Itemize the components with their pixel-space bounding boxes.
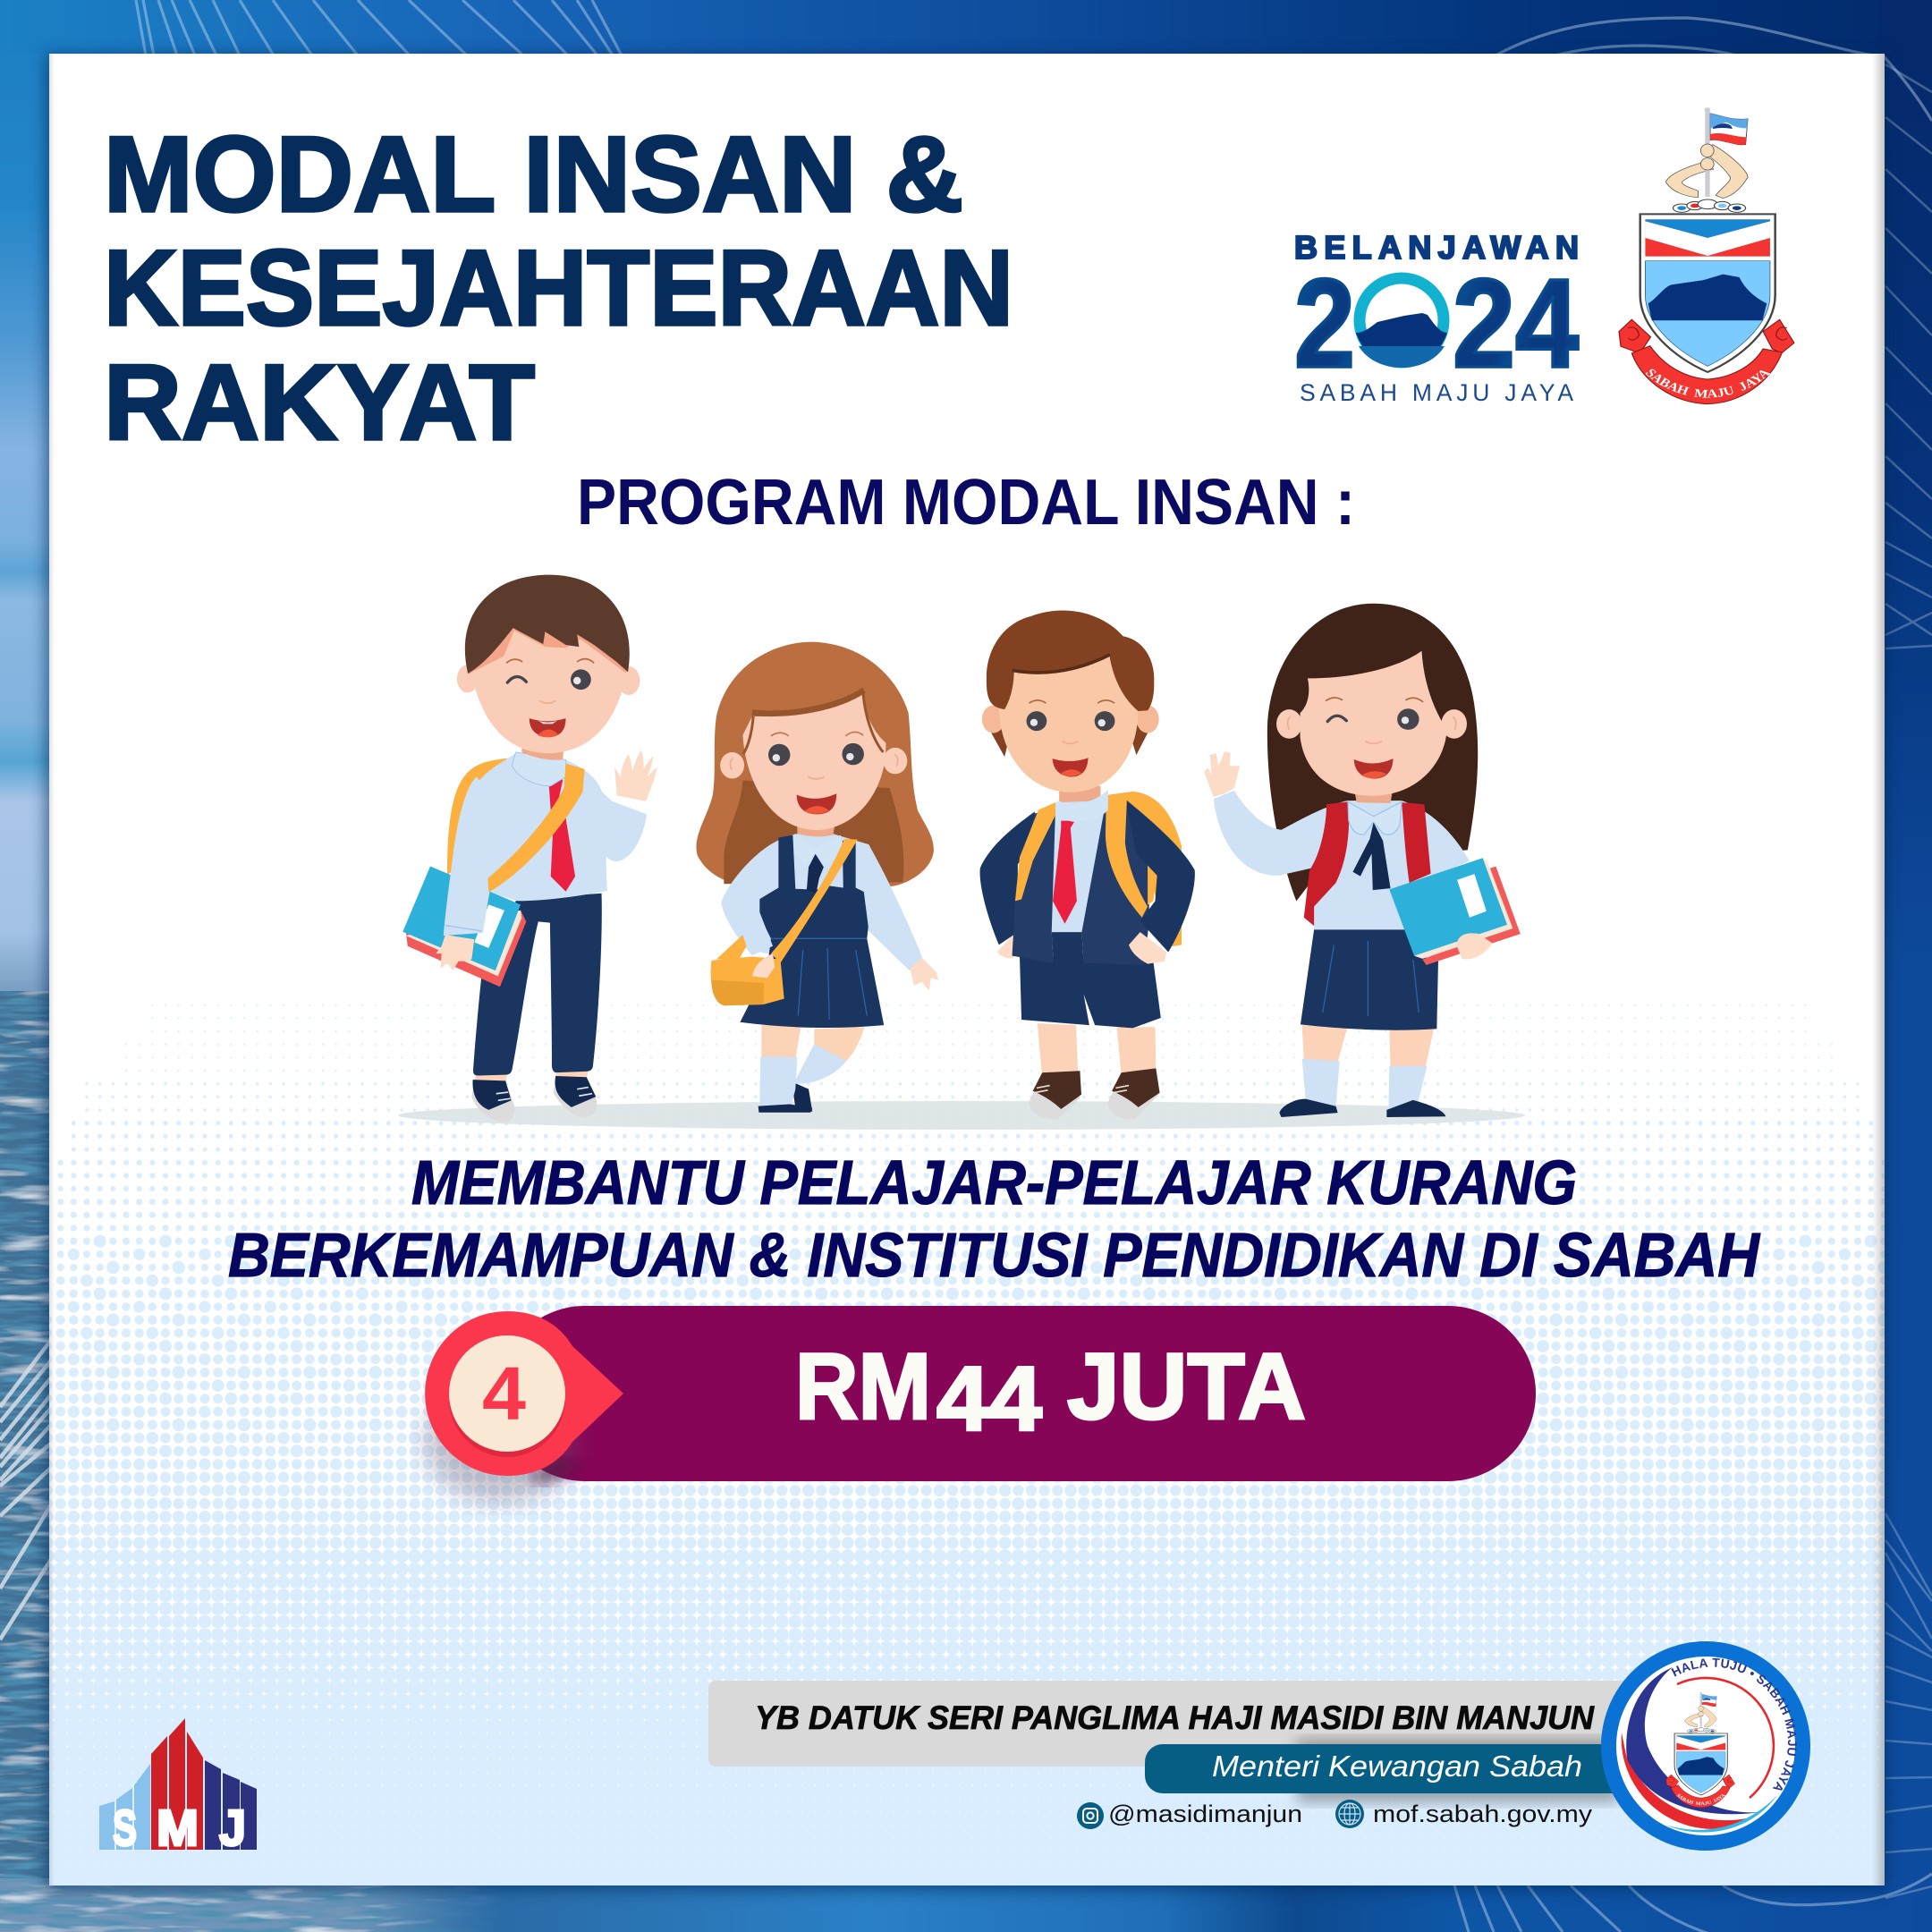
minister title bar [1145,1740,1637,1802]
number marker pin [425,1311,623,1503]
logo: Belanjawan 2024: 2 [1294,252,1355,394]
amount pill: RM44 JUTA: 44 [936,1348,1042,1450]
minister title bar: Menteri Kewangan Sabah [1212,1750,1582,1783]
logo: SMJ: J [219,1800,246,1857]
ground shadow [398,1101,1525,1130]
logo: SMJ [99,1718,257,1857]
illustration: boy with books [402,575,657,1123]
social handles [1077,1800,1593,1829]
title: RAKYAT [104,343,535,462]
seal: Hala Tuju Sabah Maju Jaya: HALA TUJU • SABAH MAJU JAYA [1671,1658,1797,1791]
logo: Belanjawan 2024: BELANJAWAN [1294,229,1579,266]
illustration: girl with shoulder bag [696,642,938,1113]
description text: MEMBANTU PELAJAR-PELAJAR KURANG [411,1148,1577,1217]
amount pill: RM44 JUTA: RM [795,1335,931,1439]
illustration: boy in blazer [980,611,1195,1120]
heading: program: PROGRAM MODAL INSAN : [577,467,1355,538]
amount pill: RM44 JUTA [497,1306,1536,1481]
description text: BERKEMAMPUAN & INSTITUSI PENDIDIKAN DI SABAH [228,1220,1760,1290]
logo: Belanjawan 2024 [1294,229,1579,406]
social handles: mof.sabah.gov.my [1373,1801,1593,1827]
title [104,114,1013,462]
title: KESEJAHTERAAN [104,228,1013,348]
logo: Sabah state crest [1619,107,1794,404]
social handles: @masidimanjun [1108,1801,1302,1827]
minister name plate [708,1681,1639,1767]
minister name plate: YB DATUK SERI PANGLIMA HAJI MASIDI BIN MANJUN [755,1699,1595,1736]
title: MODAL INSAN & [104,114,963,234]
logo: SMJ: S [113,1800,137,1857]
description text [228,1148,1760,1290]
seal: Hala Tuju Sabah Maju Jaya [1601,1641,1810,1851]
logo: Belanjawan 2024: 4 [1515,252,1579,394]
number marker pin: 4 [482,1352,526,1436]
logo: Belanjawan 2024: 2 [1453,252,1515,394]
illustration: girl waving with book [1204,604,1521,1117]
logo: SMJ: M [157,1800,199,1857]
decorative light fan on left edge [0,1339,52,1640]
amount pill: RM44 JUTA: JUTA [1067,1335,1306,1439]
logo: Belanjawan 2024: SABAH MAJU JAYA [1300,379,1573,406]
